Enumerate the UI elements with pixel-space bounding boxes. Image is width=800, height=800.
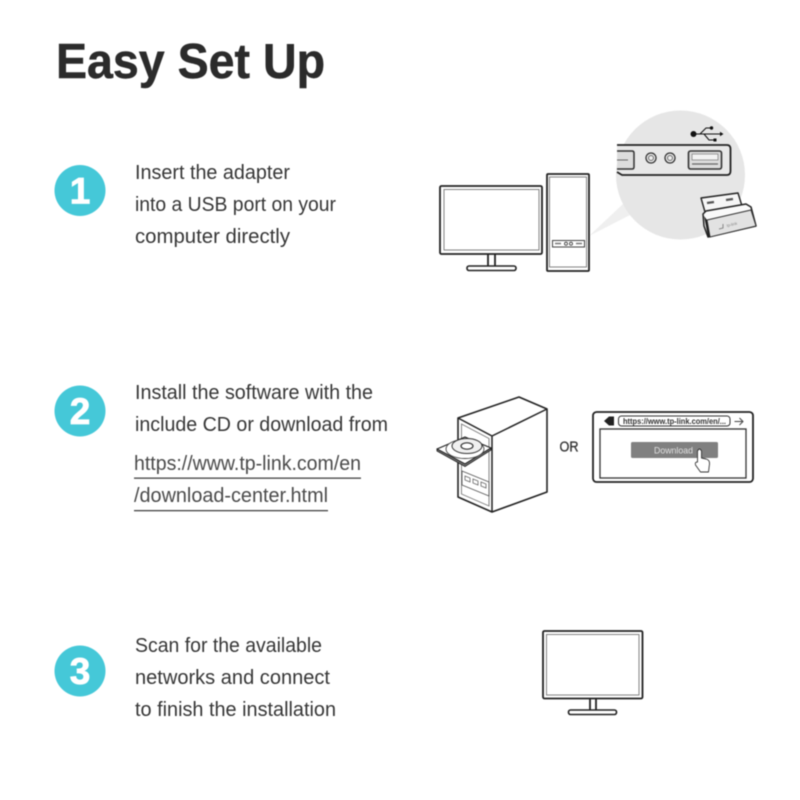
title: Easy Set Up xyxy=(56,35,325,89)
icon: USB adapter: tp-link xyxy=(726,221,738,228)
icon: monitor xyxy=(440,186,542,270)
CD tray and disc xyxy=(437,437,491,466)
zoom callout circle with port panel xyxy=(589,110,745,240)
step 3 text: to finish the installation xyxy=(135,699,336,721)
icon: pointing hand xyxy=(695,449,710,472)
step 1 number badge: 1 xyxy=(70,170,90,212)
address bar: https://www.tp-link.com/en/... xyxy=(623,417,726,426)
icon: USB adapter xyxy=(701,193,756,237)
step 2 number badge xyxy=(54,386,106,436)
step 3 number badge: 3 xyxy=(70,651,90,692)
step 1 number badge xyxy=(54,165,106,216)
step 2 text: Install the software with the xyxy=(135,382,373,404)
step 2 text: include CD or download from xyxy=(135,414,388,436)
icon: forward arrow xyxy=(734,418,743,425)
download button: Download xyxy=(654,446,693,456)
step 2 text xyxy=(134,382,388,511)
illustration: computer with USB port zoom and adapter xyxy=(440,110,756,271)
step 3 text xyxy=(135,635,336,721)
OR label: OR xyxy=(560,440,578,456)
step 3 text: Scan for the available xyxy=(135,635,322,657)
icon: back arrow xyxy=(604,416,614,426)
illustration: monitor xyxy=(543,631,642,714)
download link: https://www.tp-link.com/en xyxy=(134,453,361,475)
step 1 text xyxy=(135,162,336,248)
step 2 number badge: 2 xyxy=(70,391,90,432)
icon: computer tower xyxy=(547,174,589,271)
download link: /download-center.html xyxy=(134,485,328,507)
step 1 text: into a USB port on your xyxy=(135,194,336,216)
step 3 text: networks and connect xyxy=(135,667,330,689)
illustration: browser download window xyxy=(593,412,753,482)
download link xyxy=(134,453,361,511)
icon: USB symbol xyxy=(690,126,724,142)
step 1 text: Insert the adapter xyxy=(135,162,290,184)
step 1 text: computer directly xyxy=(135,226,290,248)
illustration: computer with CD tray xyxy=(437,397,547,512)
download button xyxy=(631,442,718,458)
step 3 number badge xyxy=(54,646,106,696)
